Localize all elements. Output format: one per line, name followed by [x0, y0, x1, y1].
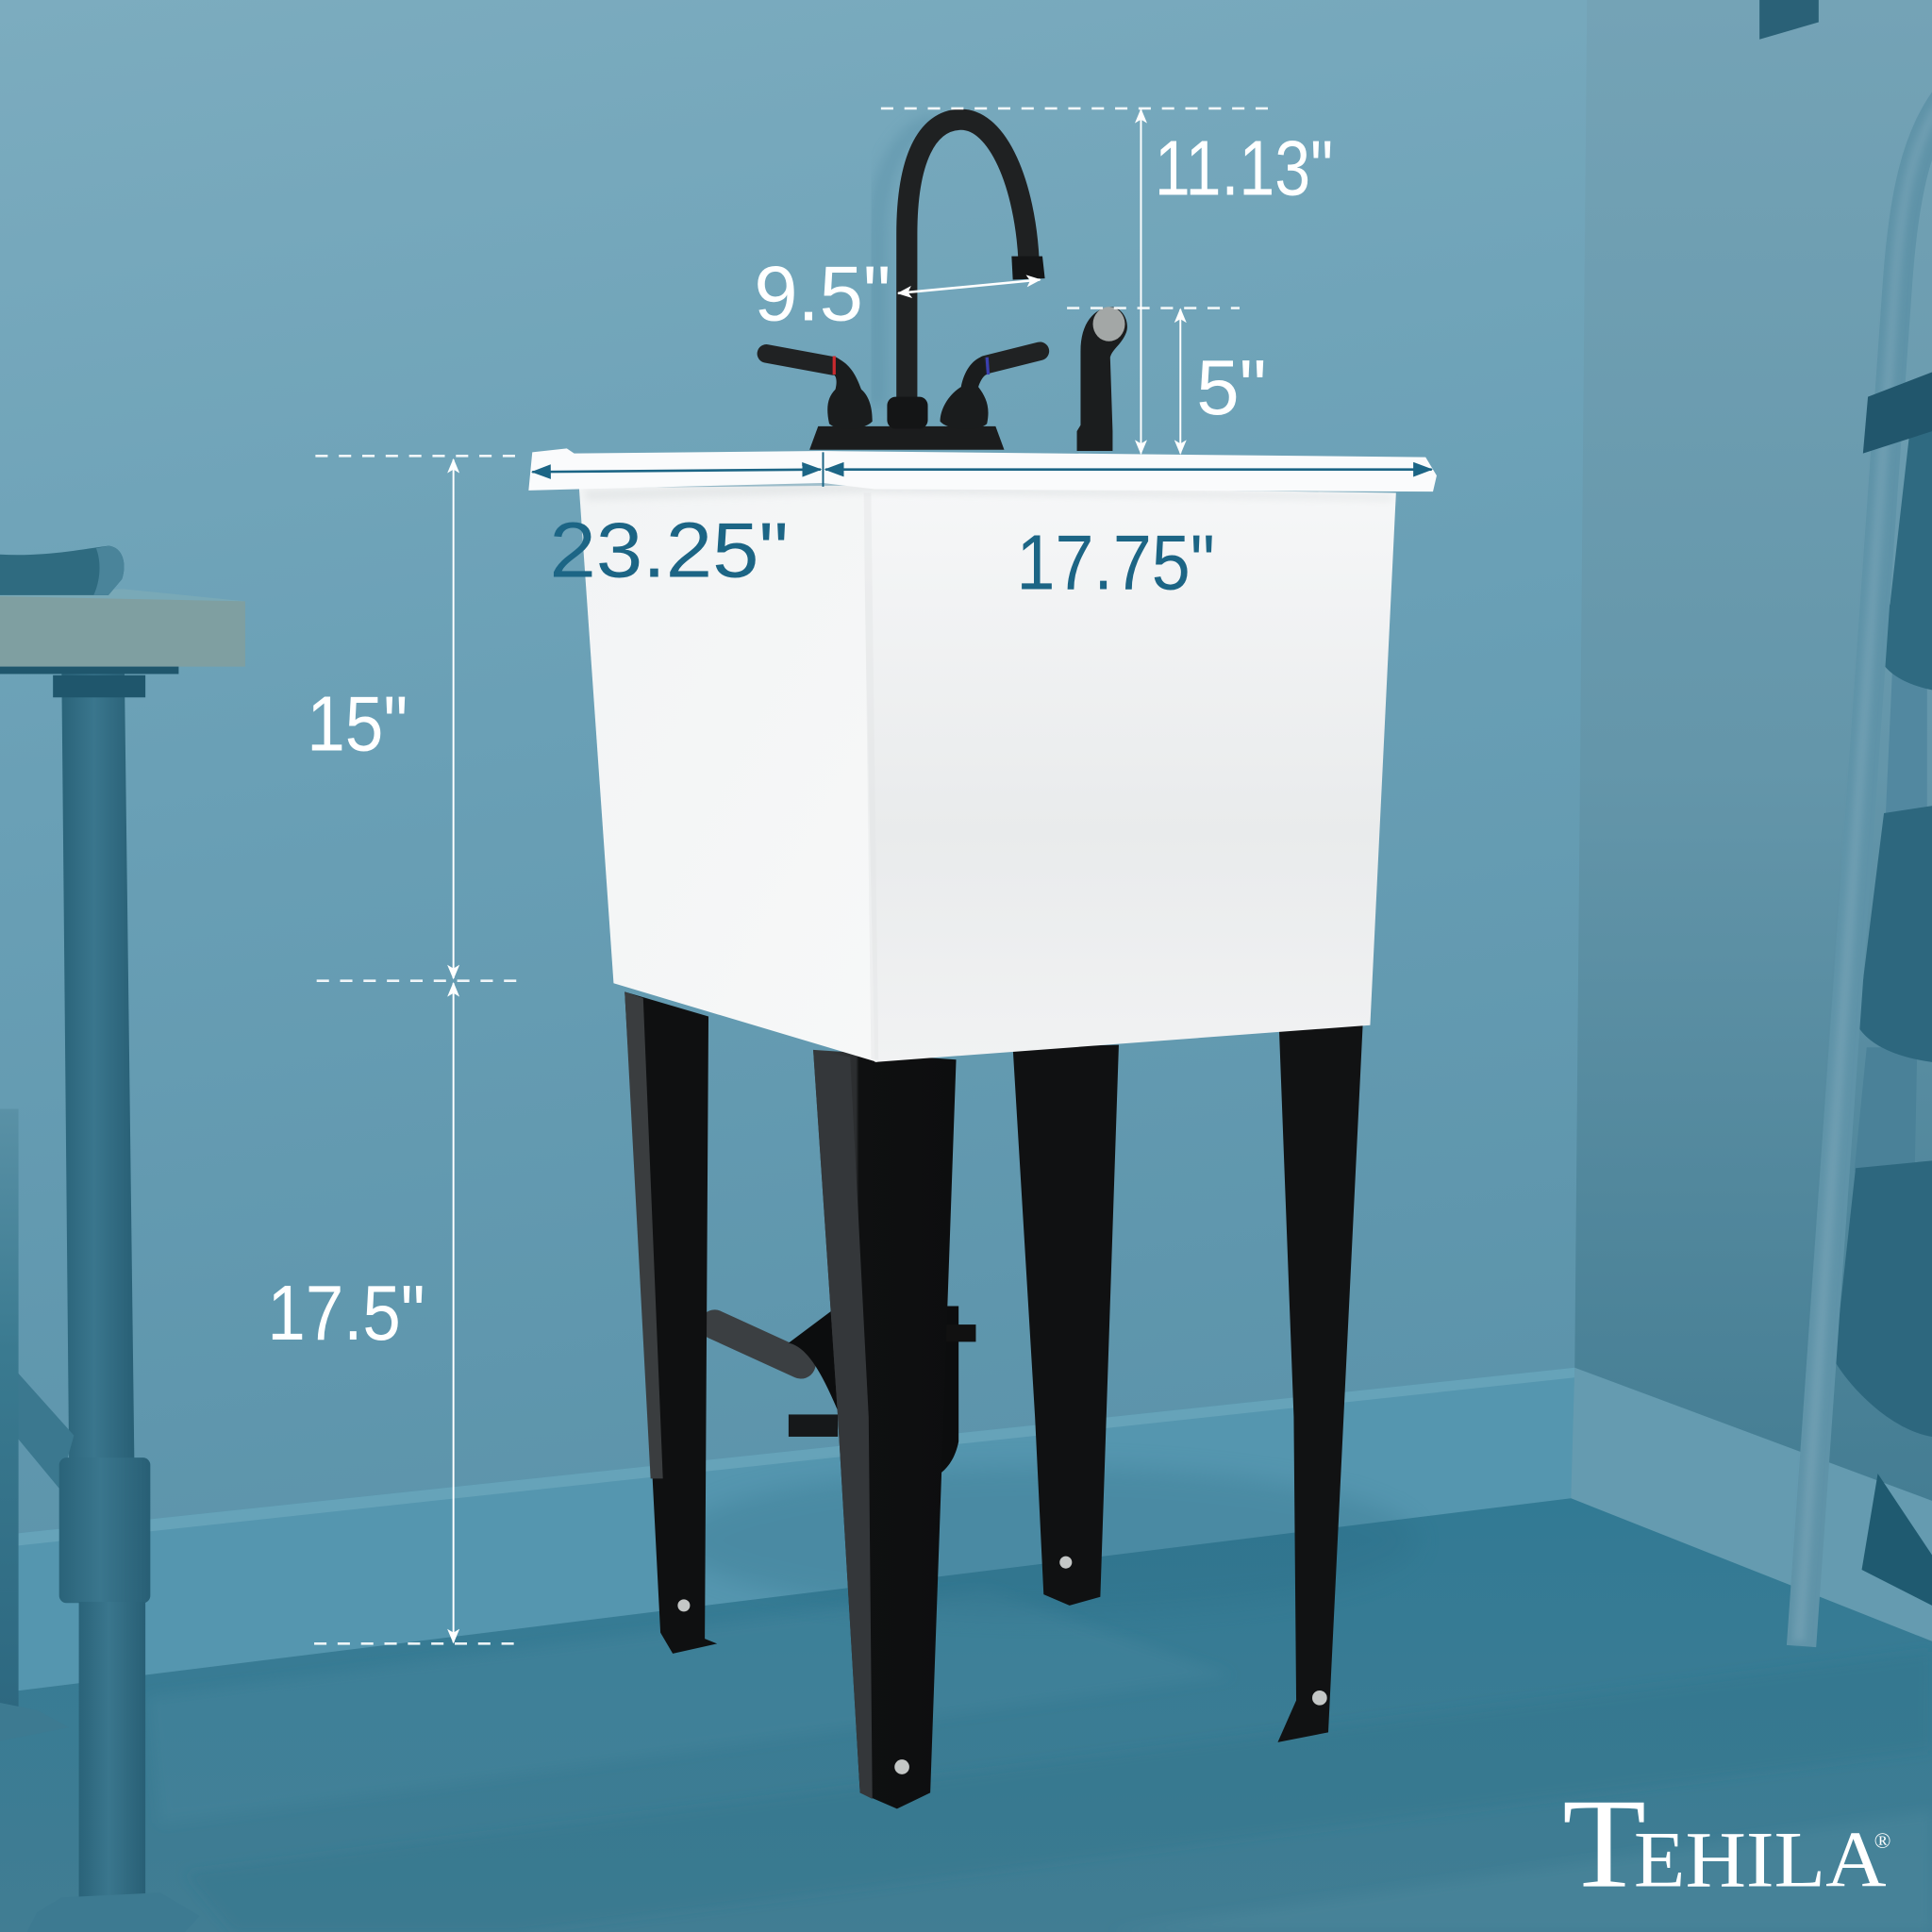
arrow: tub height — [453, 459, 455, 978]
label: 23.25: 23.25" — [550, 508, 789, 593]
label: 15: 15" — [307, 681, 408, 767]
logo: Tehila: EHILA — [1634, 1816, 1887, 1905]
side sprayer — [1077, 307, 1127, 451]
label: 9.5: 9.5" — [754, 252, 891, 338]
plank top — [0, 589, 245, 601]
wall bracket top right — [1759, 0, 1819, 40]
floor planks — [148, 1590, 1932, 1932]
towel — [0, 546, 124, 595]
arrow: spout reach — [898, 279, 1040, 293]
label: 17.5: 17.5" — [267, 1271, 425, 1357]
arrow: sprayer height — [1179, 309, 1181, 454]
base plate — [809, 426, 1004, 450]
left handle — [766, 354, 873, 429]
back right leg — [1013, 1045, 1119, 1606]
foot flange — [27, 1892, 200, 1932]
rear rail — [1885, 665, 1927, 825]
stool pipe — [61, 672, 134, 1460]
spout collar — [887, 397, 928, 429]
left face — [579, 486, 877, 1062]
right baseboard — [1571, 1368, 1932, 1641]
faucet — [766, 120, 1127, 451]
divider tick — [822, 452, 824, 487]
far pipe — [0, 1109, 19, 1713]
guide: top of faucet — [881, 108, 1276, 109]
right wall — [1574, 0, 1932, 1528]
guide: top of sprayer — [1067, 308, 1240, 309]
spout tip — [1011, 257, 1045, 279]
right handle — [941, 351, 1040, 429]
arrow: depth — [532, 470, 821, 472]
corner shadow — [868, 492, 874, 1059]
label: 5: 5" — [1196, 345, 1267, 431]
guide: sink bottom — [317, 980, 518, 982]
sink legs and trap — [625, 991, 1363, 1808]
pipe joint — [59, 1457, 150, 1603]
front centre leg — [813, 1050, 957, 1808]
floor — [0, 1498, 1932, 1932]
label: 11.13: 11.13" — [1155, 125, 1333, 211]
label: 17.75: 17.75" — [1017, 520, 1215, 606]
guide: sink top — [315, 455, 518, 457]
front rail — [1799, 93, 1932, 1646]
under-rim shade — [584, 483, 1392, 500]
logo: Tehila: T — [1562, 1774, 1646, 1915]
rim — [528, 448, 1437, 491]
step 1 — [1875, 385, 1932, 690]
left baseboard — [0, 1368, 1574, 1693]
guide: floor — [314, 1642, 515, 1644]
bottom foot — [1862, 1474, 1932, 1606]
right face — [862, 486, 1396, 1062]
arrow: width — [825, 469, 1432, 471]
lower pipe — [79, 1602, 145, 1897]
arrow: faucet height — [1140, 109, 1141, 454]
left wall — [0, 0, 1590, 1725]
step 3 — [1826, 1160, 1932, 1437]
sink shadow — [677, 1466, 1417, 1614]
step 2 — [1852, 806, 1932, 1062]
drain trap — [715, 1306, 975, 1482]
arrow: leg height — [453, 983, 455, 1642]
logo: Tehila — [1562, 1774, 1890, 1915]
wall shadow behind faucet — [877, 124, 937, 407]
plank — [0, 596, 245, 667]
spout — [907, 120, 1029, 402]
diagonal brace — [0, 1353, 74, 1489]
sink tub — [528, 448, 1437, 1062]
step ladder at right — [1799, 93, 1932, 1646]
bracket — [1863, 372, 1932, 454]
front right leg — [1277, 1025, 1363, 1742]
stool at left — [0, 546, 245, 1932]
logo: Tehila: ® — [1874, 1829, 1890, 1854]
back left leg — [625, 991, 717, 1654]
